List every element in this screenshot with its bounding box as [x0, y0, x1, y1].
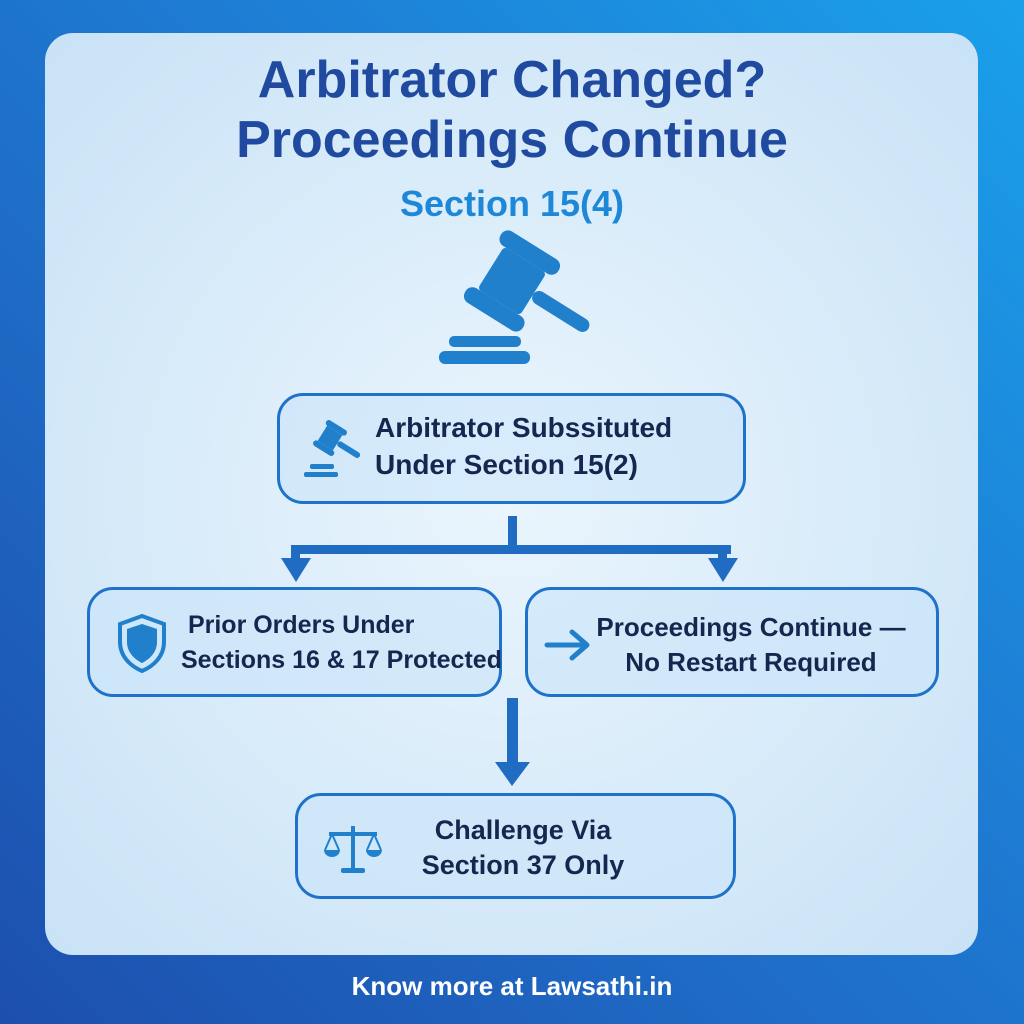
box: proceedings continue	[525, 587, 939, 697]
title	[236, 51, 788, 169]
icon: small gavel	[304, 420, 360, 477]
text	[375, 412, 672, 480]
icon: scales	[324, 826, 382, 873]
box: arbitrator substituted	[277, 393, 746, 504]
text: Proceedings Continue —	[596, 612, 906, 642]
text: Challenge Via	[435, 815, 611, 845]
box: challenge	[295, 793, 736, 899]
icon: arrow right	[544, 630, 590, 660]
text	[596, 612, 906, 677]
text	[422, 815, 624, 880]
text: Sections 16 & 17 Protected	[181, 646, 502, 674]
icon: shield	[118, 614, 166, 674]
title: Proceedings Continue	[236, 111, 788, 169]
text: Under Section 15(2)	[375, 449, 638, 480]
subtitle: Section 15(4)	[400, 183, 624, 224]
text: Arbitrator Subssituted	[375, 412, 672, 443]
text	[181, 611, 502, 674]
footer: Know more at Lawsathi.in	[352, 971, 672, 1001]
text: No Restart Required	[625, 647, 877, 677]
title: Arbitrator Changed?	[258, 51, 766, 109]
text: Section 37 Only	[422, 850, 624, 880]
text: Prior Orders Under	[188, 611, 414, 639]
box: prior orders	[87, 587, 502, 697]
